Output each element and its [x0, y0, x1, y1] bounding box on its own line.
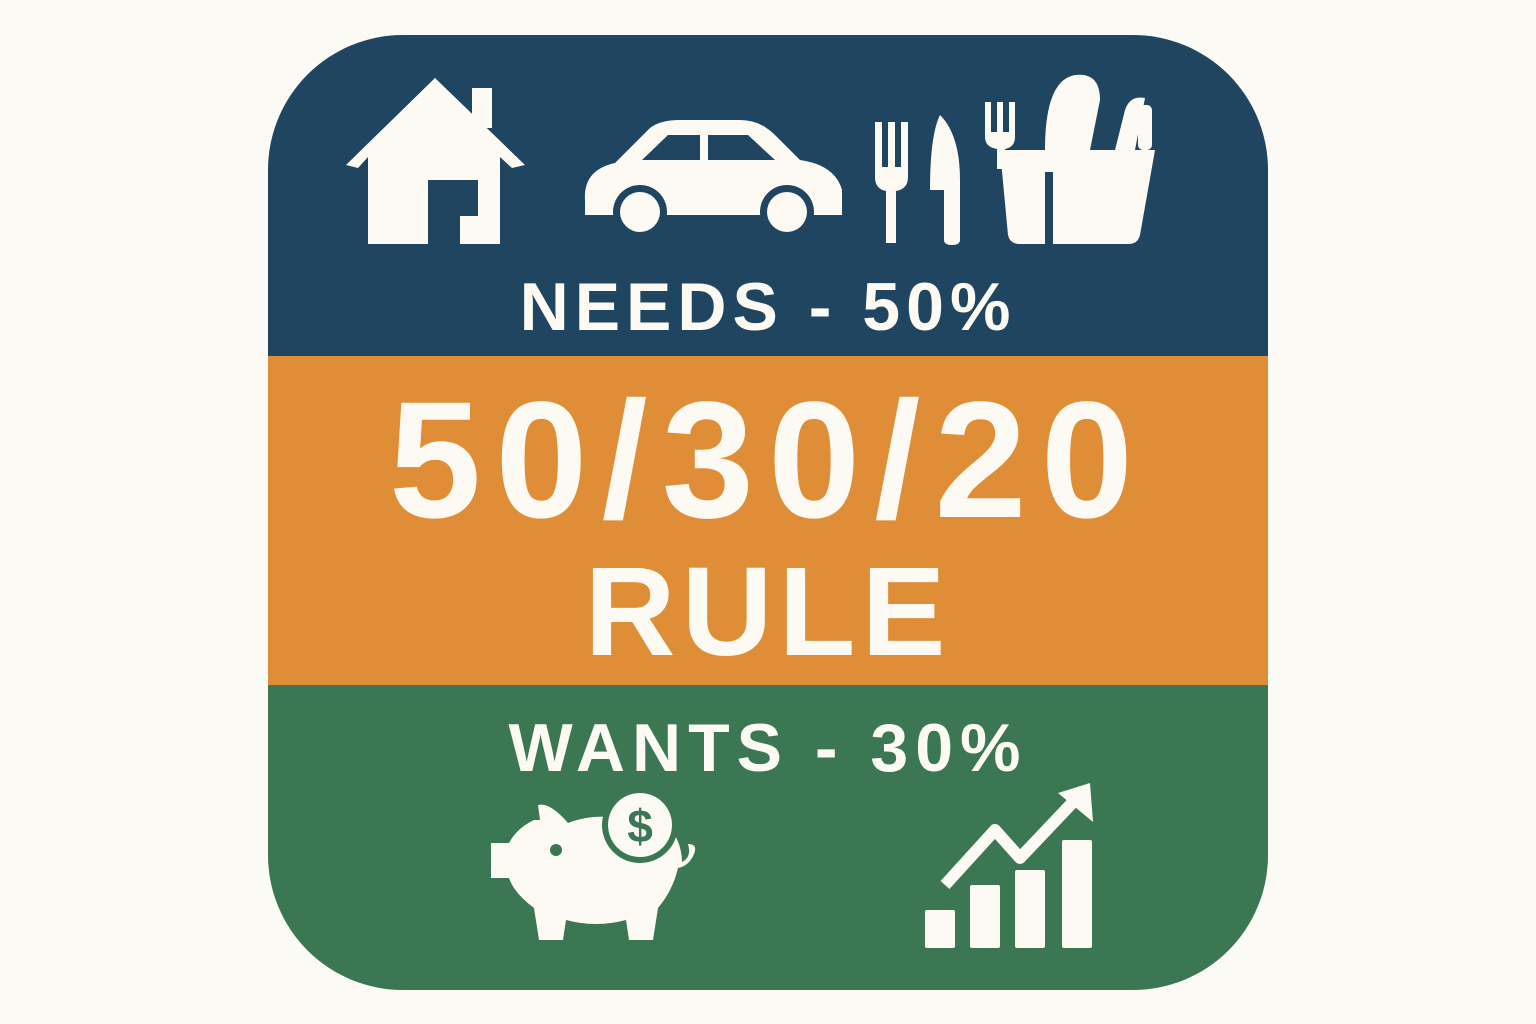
icon: piggy bank: $ [627, 800, 653, 852]
panel: needs band [268, 35, 1268, 356]
icon: car [585, 120, 842, 239]
panel: title band [268, 356, 1268, 685]
panel: budget card [268, 35, 1268, 990]
heading: wants: WANTS - 30% [508, 710, 1028, 786]
icon: grocery basket [985, 75, 1155, 244]
icon: fork and knife [875, 115, 960, 245]
panel: wants band [268, 685, 1268, 990]
icon: growth chart [925, 783, 1093, 948]
title line 1: 50/30/20 [389, 368, 1147, 553]
icon: house [346, 78, 525, 244]
heading: needs: NEEDS - 50% [520, 269, 1016, 345]
title line 2: RULE [584, 541, 952, 682]
icon: piggy bank [491, 787, 695, 940]
